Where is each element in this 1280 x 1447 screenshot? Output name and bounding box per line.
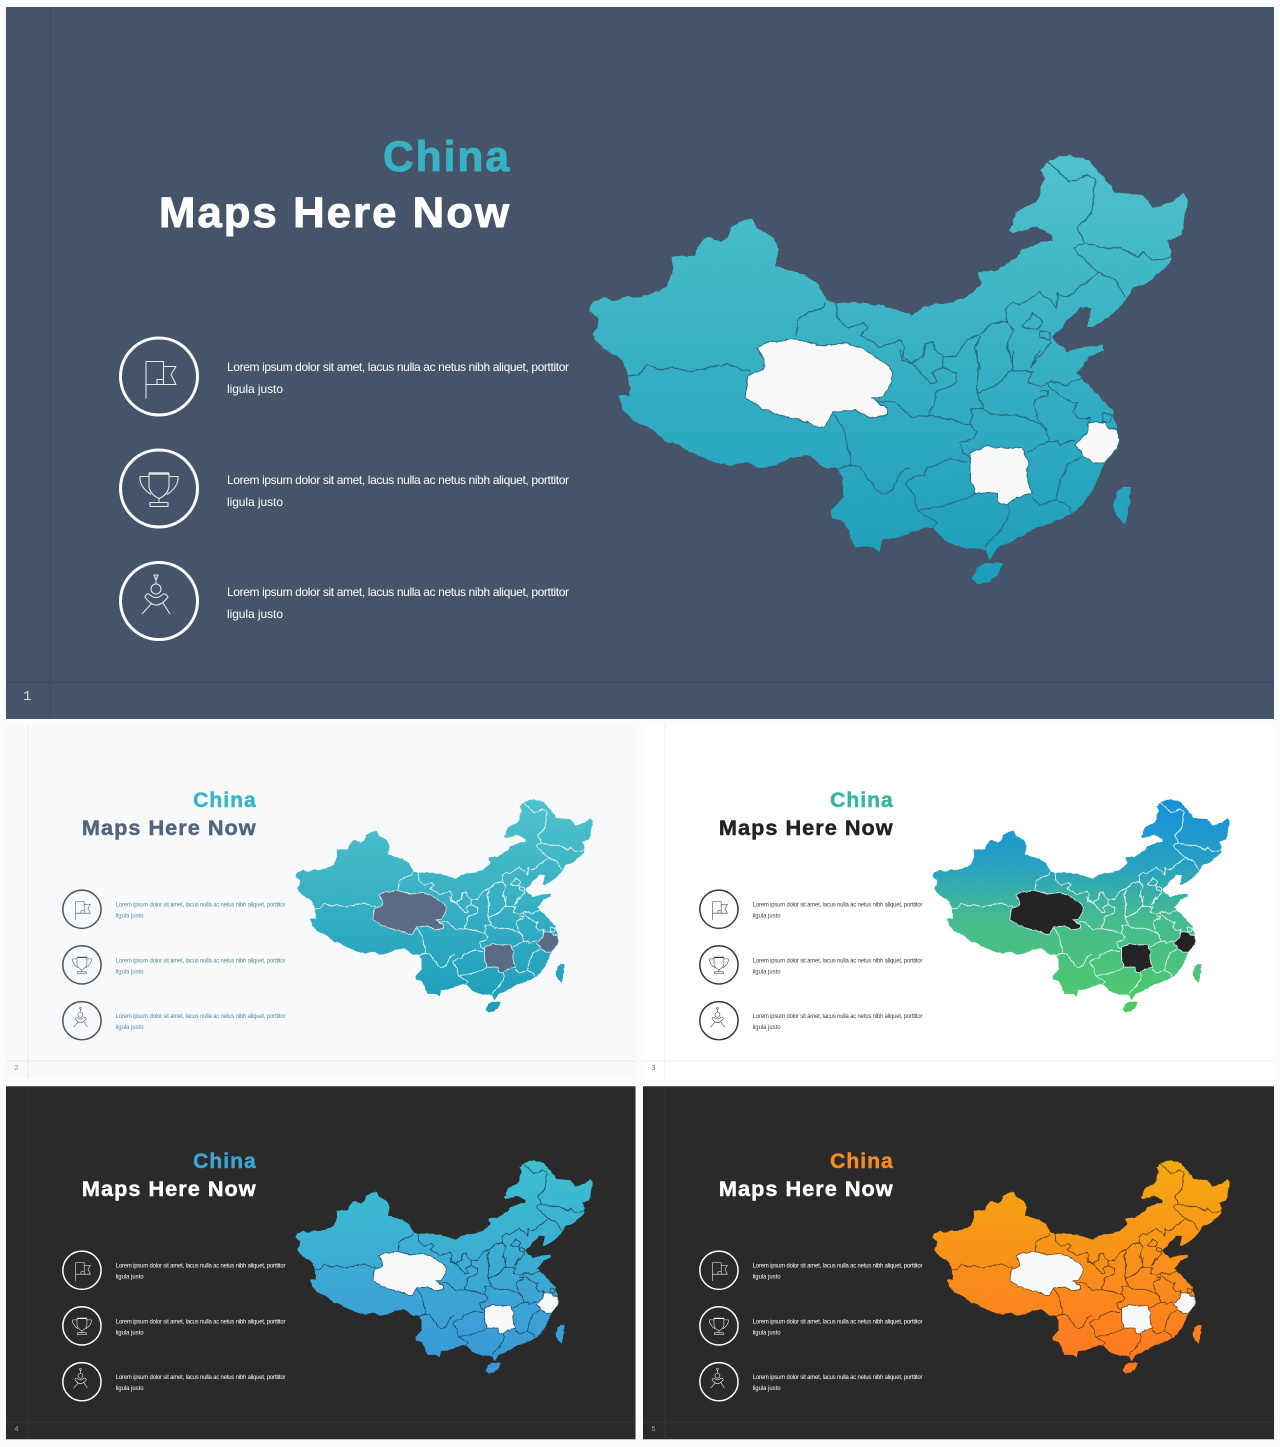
title: China: China [193, 1149, 257, 1173]
text block 3: ligula justo [227, 607, 283, 621]
text block 1: ligula justo [116, 913, 144, 919]
map of China, amber to orange gradient with white highlighted provinces [932, 1160, 1230, 1373]
title: Maps Here Now: Maps Here Now [719, 816, 894, 840]
text block 2: Lorem ipsum dolor sit amet, lacus nulla ac netus nibh aliquet, porttitor [116, 959, 286, 965]
icon: flag badge [120, 338, 198, 415]
icon: compass badge [700, 1002, 738, 1040]
icon: compass badge [63, 1002, 101, 1040]
icon: trophy badge [700, 1307, 738, 1345]
text block 1: Lorem ipsum dolor sit amet, lacus nulla ac netus nibh aliquet, porttitor [753, 903, 923, 909]
text block 2: ligula justo [753, 1331, 781, 1337]
slide 1 background [6, 7, 1274, 719]
map of China, blue to green gradient with black highlighted provinces [932, 799, 1230, 1012]
icon: trophy badge [63, 1307, 101, 1345]
title: Maps Here Now: Maps Here Now [82, 816, 257, 840]
text block 3: Lorem ipsum dolor sit amet, lacus nulla ac netus nibh aliquet, porttitor [116, 1014, 286, 1020]
text block 1: Lorem ipsum dolor sit amet, lacus nulla ac netus nibh aliquet, porttitor [227, 360, 569, 374]
slide number 3: 3 [651, 1065, 656, 1073]
icon: trophy badge [120, 450, 198, 527]
slide number 4: 4 [14, 1426, 19, 1434]
text block 2: ligula justo [116, 1331, 144, 1337]
text block 3: ligula justo [116, 1025, 144, 1031]
text block 3: ligula justo [753, 1025, 781, 1031]
text block 2: ligula justo [116, 970, 144, 976]
text block 1: ligula justo [227, 382, 283, 396]
icon: trophy badge [63, 946, 101, 984]
title: Maps Here Now: Maps Here Now [719, 1177, 894, 1201]
text block 2: ligula justo [753, 970, 781, 976]
icon: flag badge [700, 890, 738, 928]
text block 2: Lorem ipsum dolor sit amet, lacus nulla ac netus nibh aliquet, porttitor [116, 1320, 286, 1326]
title: China: China [830, 788, 894, 812]
slide 3: white slide [643, 725, 1274, 1078]
text block 3: Lorem ipsum dolor sit amet, lacus nulla ac netus nibh aliquet, porttitor [753, 1014, 923, 1020]
text block 2: Lorem ipsum dolor sit amet, lacus nulla ac netus nibh aliquet, porttitor [227, 473, 569, 487]
text block 1: Lorem ipsum dolor sit amet, lacus nulla ac netus nibh aliquet, porttitor [753, 1264, 923, 1270]
icon: flag badge [63, 1251, 101, 1289]
slide 4 background [6, 1086, 636, 1439]
title: China: China [830, 1149, 894, 1173]
text block 3: Lorem ipsum dolor sit amet, lacus nulla ac netus nibh aliquet, porttitor [116, 1375, 286, 1381]
slide 4: dark slide with blue map [6, 1086, 636, 1439]
slide 5: dark slide with orange map [643, 1086, 1274, 1439]
text block 3: Lorem ipsum dolor sit amet, lacus nulla ac netus nibh aliquet, porttitor [753, 1375, 923, 1381]
map of China, teal gradient with slate highlighted provinces [295, 799, 593, 1012]
slide 1: dark slate main slide [6, 7, 1274, 719]
text block 3: Lorem ipsum dolor sit amet, lacus nulla ac netus nibh aliquet, porttitor [227, 585, 569, 599]
text block 1: Lorem ipsum dolor sit amet, lacus nulla ac netus nibh aliquet, porttitor [116, 1264, 286, 1270]
text block 1: ligula justo [753, 1274, 781, 1280]
map of China, cyan to blue gradient with white highlighted provinces [295, 1160, 593, 1373]
title: Maps Here Now: Maps Here Now [159, 189, 511, 237]
icon: trophy badge [700, 946, 738, 984]
slide 2: light slide [6, 725, 636, 1078]
title: China: China [383, 133, 511, 181]
slide number 1: 1 [23, 689, 31, 705]
map of China, teal gradient with white highlighted provinces [588, 155, 1188, 584]
text block 2: ligula justo [227, 495, 283, 509]
slide 5 background [643, 1086, 1274, 1439]
slide 2 background [6, 725, 636, 1078]
text block 3: ligula justo [753, 1386, 781, 1392]
text block 3: ligula justo [116, 1386, 144, 1392]
icon: compass badge [700, 1363, 738, 1401]
slide number 2: 2 [14, 1065, 19, 1073]
icon: flag badge [700, 1251, 738, 1289]
text block 1: Lorem ipsum dolor sit amet, lacus nulla ac netus nibh aliquet, porttitor [116, 903, 286, 909]
text block 1: ligula justo [116, 1274, 144, 1280]
icon: flag badge [63, 890, 101, 928]
text block 2: Lorem ipsum dolor sit amet, lacus nulla ac netus nibh aliquet, porttitor [753, 1320, 923, 1326]
title: China: China [193, 788, 257, 812]
title: Maps Here Now: Maps Here Now [82, 1177, 257, 1201]
icon: compass badge [63, 1363, 101, 1401]
text block 2: Lorem ipsum dolor sit amet, lacus nulla ac netus nibh aliquet, porttitor [753, 959, 923, 965]
slide 3 background [643, 725, 1274, 1078]
icon: compass badge [120, 562, 198, 640]
text block 1: ligula justo [753, 913, 781, 919]
slide number 5: 5 [651, 1426, 656, 1434]
